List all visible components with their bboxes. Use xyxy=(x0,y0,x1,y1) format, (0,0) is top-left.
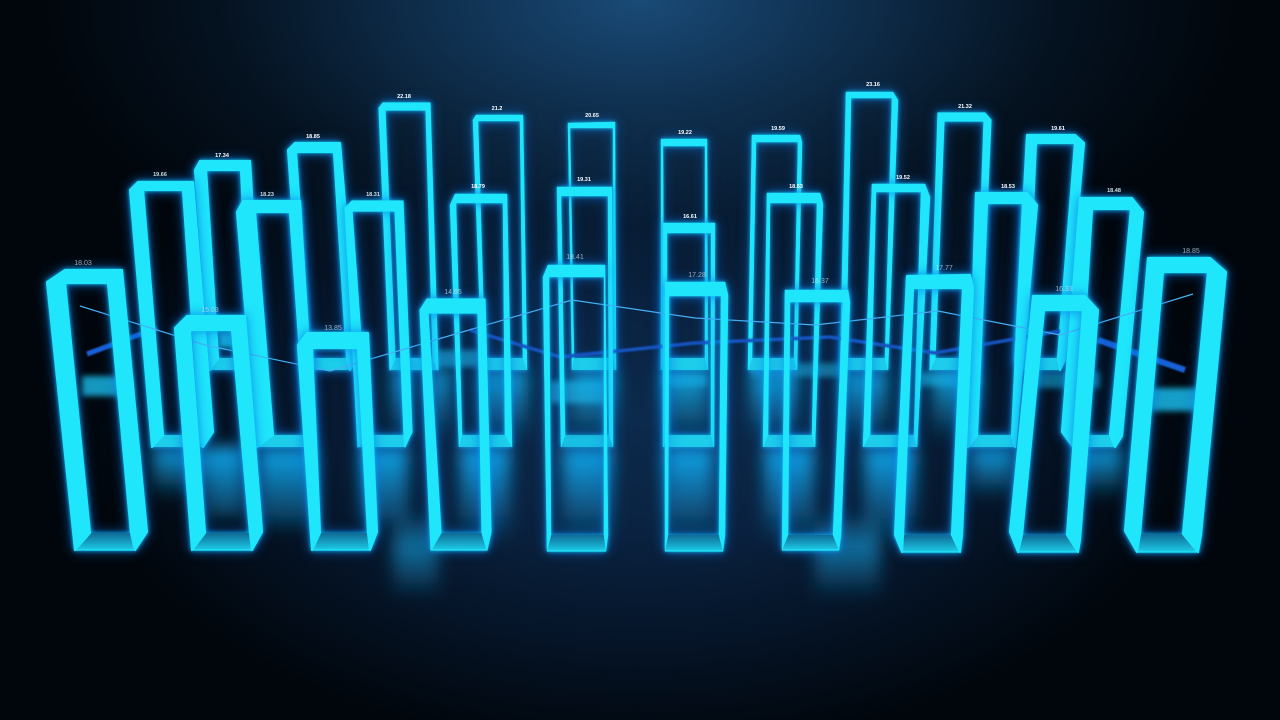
value labels: 20.65 xyxy=(585,113,599,119)
value labels: 18.41 xyxy=(566,254,584,261)
thick blue line series xyxy=(87,328,1185,370)
value labels: 13.85 xyxy=(324,325,342,332)
bar 18.79 xyxy=(450,194,512,447)
value labels: 19.52 xyxy=(896,175,910,181)
bar 19.52 xyxy=(863,184,930,447)
value labels: 23.16 xyxy=(866,82,880,88)
bar 16.33 xyxy=(1010,296,1098,552)
value labels: 16.33 xyxy=(1055,286,1073,293)
bar 18.53 right xyxy=(968,193,1037,447)
value labels: 18.85 xyxy=(1182,248,1200,255)
bar 18.03 xyxy=(47,270,147,550)
bar 16.61 xyxy=(663,223,715,447)
bar 15.03 xyxy=(175,316,262,550)
value labels: 17.77 xyxy=(935,265,953,272)
value labels: 14.65 xyxy=(444,289,462,296)
front row of bars xyxy=(47,258,1226,552)
value labels: 16.61 xyxy=(683,214,697,220)
bar 13.85 xyxy=(298,333,377,550)
back row of bars xyxy=(195,92,1084,370)
value labels: 19.22 xyxy=(678,130,692,136)
value labels: 19.66 xyxy=(153,172,167,178)
value labels: 18.53 xyxy=(789,184,803,190)
bar 17.34 xyxy=(195,161,262,370)
bar 18.23 xyxy=(237,201,315,447)
bar 19.61 xyxy=(1015,135,1084,370)
bar 21.2 xyxy=(473,115,527,370)
bar 19.22 xyxy=(661,139,708,370)
value labels: 19.31 xyxy=(577,177,591,183)
value labels: 18.03 xyxy=(74,260,92,267)
bar 17.28 xyxy=(665,282,728,551)
value labels: 18.48 xyxy=(1107,188,1121,194)
value labels xyxy=(74,82,1200,332)
value labels: 15.03 xyxy=(201,307,219,314)
bar 21.32 xyxy=(930,113,991,370)
bar 18.85 right xyxy=(1125,258,1226,552)
bar 18.85 xyxy=(288,143,358,370)
floor reflections xyxy=(82,331,1200,600)
bar 18.53 xyxy=(763,193,823,447)
value labels: 19.61 xyxy=(1051,126,1065,132)
bar 19.59 xyxy=(748,135,802,370)
bar 18.31 xyxy=(345,201,412,447)
middle row of bars xyxy=(130,182,1143,447)
value labels: 19.59 xyxy=(771,126,785,132)
value labels: 17.28 xyxy=(688,272,706,279)
bar 20.65 xyxy=(568,122,616,370)
value labels: 17.34 xyxy=(215,153,230,159)
bar 18.48 xyxy=(1062,198,1143,447)
value labels: 16.37 xyxy=(811,278,829,285)
value labels: 18.79 xyxy=(471,184,485,190)
bar 14.65 xyxy=(420,299,491,550)
bar 18.41 xyxy=(543,265,608,551)
thin light-blue line series xyxy=(80,294,1193,371)
value labels: 18.53 xyxy=(1001,184,1015,190)
bar 16.37 xyxy=(782,290,850,550)
value labels: 21.32 xyxy=(958,104,972,110)
bar 17.77 xyxy=(895,275,973,552)
value labels: 18.85 xyxy=(306,134,320,140)
bar 19.31 xyxy=(557,187,613,447)
bar 19.66 xyxy=(130,182,213,447)
value labels: 21.2 xyxy=(492,106,502,112)
bar 23.16 xyxy=(840,92,898,370)
value labels: 18.23 xyxy=(260,192,274,198)
value labels: 22.18 xyxy=(397,94,411,100)
value labels: 18.31 xyxy=(366,192,380,198)
bar 22.18 xyxy=(379,103,438,370)
